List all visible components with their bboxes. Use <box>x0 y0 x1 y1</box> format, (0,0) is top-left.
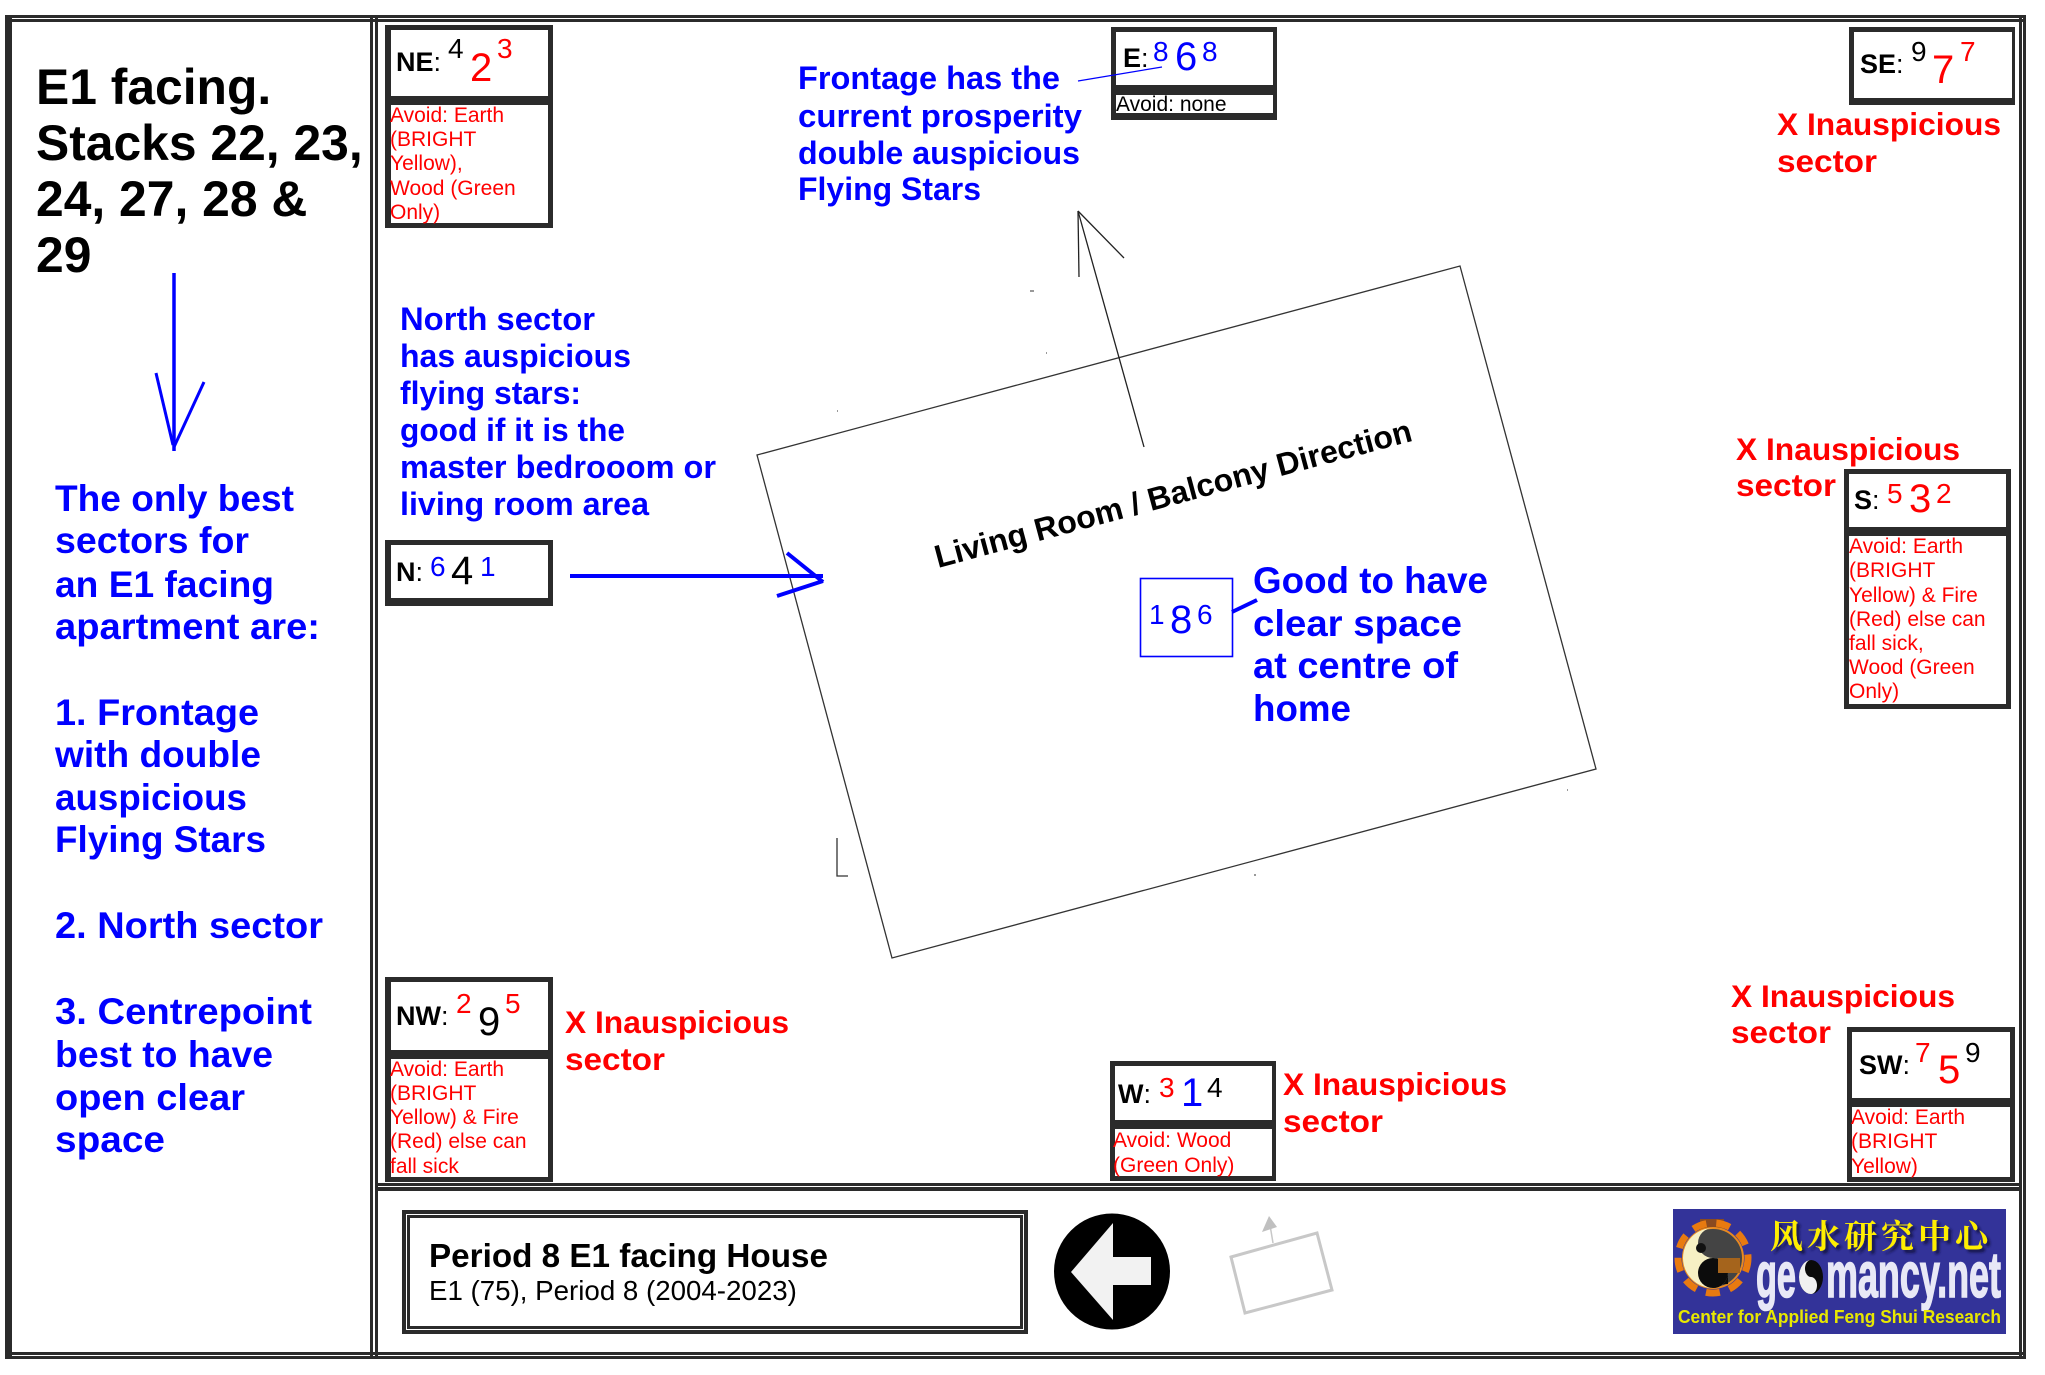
panel: NW sector: Avoid: Earth <box>390 1058 504 1081</box>
label: living room direction: Living Room / Balcony Direction <box>930 413 1416 575</box>
callout: frontage: Flying Stars <box>798 171 981 207</box>
connector: centre box to callout <box>1232 600 1257 612</box>
panel: NE sector: (BRIGHT <box>390 128 476 151</box>
text block: best sectors list <box>54 477 323 1160</box>
text block: best sectors list: sectors for <box>55 519 249 561</box>
panel: SE sector: 9 <box>1911 36 1927 67</box>
callout: centre clear space: home <box>1253 687 1351 729</box>
panel: W sector <box>1110 1061 1276 1181</box>
panel: W sector: Avoid: Wood <box>1113 1129 1231 1152</box>
diagram: house plan <box>757 266 1596 958</box>
text block: best sectors list: 2. North sector <box>55 904 323 946</box>
panel: NW sector: 2 <box>456 988 472 1019</box>
panel: NE sector: Wood (Green <box>390 177 516 200</box>
panel: NE sector: 3 <box>497 33 513 64</box>
panel: S sector: S: <box>1854 485 1880 515</box>
panel: NW sector: 9 <box>478 1000 500 1044</box>
panel: centre star box <box>1140 578 1232 656</box>
icon: facing direction arrow in circle <box>1054 1214 1170 1330</box>
callout: SW inauspicious: X Inauspicious <box>1731 978 1955 1014</box>
panel: NE sector: Only) <box>390 201 440 224</box>
title <box>36 59 363 283</box>
callout: S inauspicious <box>1736 431 1960 503</box>
callout: north sector: master bedrooom or <box>400 449 716 485</box>
panel: SW sector: Yellow) <box>1851 1155 1918 1178</box>
callout: north sector: has auspicious <box>400 338 631 374</box>
callout: north sector: flying stars: <box>400 375 581 411</box>
icon: bagua yin yang <box>1678 1219 1748 1293</box>
logo: geomancy.net <box>1673 1209 2006 1334</box>
small marks <box>837 291 1568 875</box>
callout: SW inauspicious <box>1731 978 1955 1050</box>
title: Stacks 22, 23, <box>36 115 363 171</box>
text block: best sectors list: open clear <box>55 1076 245 1118</box>
panel: SW sector: (BRIGHT <box>1851 1130 1938 1153</box>
panel: left sidebar <box>36 59 363 1160</box>
callout: north sector <box>400 301 716 522</box>
text block: best sectors list: apartment are: <box>55 605 320 647</box>
text block: best sectors list: auspicious <box>55 776 247 818</box>
panel: S sector: 5 <box>1887 478 1903 509</box>
icon: mini house orientation <box>1231 1216 1332 1313</box>
panel: NE sector <box>385 25 553 228</box>
callout: centre clear space: Good to have <box>1253 559 1488 601</box>
panel: NE sector: 4 <box>448 33 464 64</box>
callout: frontage <box>798 60 1082 207</box>
callout: S inauspicious: sector <box>1736 467 1836 503</box>
panel: E sector: Avoid: none <box>1116 93 1227 116</box>
callout: north sector: good if it is the <box>400 412 625 448</box>
callout: centre clear space: at centre of <box>1253 644 1459 686</box>
callout: SE inauspicious: X Inauspicious <box>1777 106 2001 142</box>
panel: SW sector: Avoid: Earth <box>1851 1106 1965 1129</box>
panel: W sector: (Green Only) <box>1113 1154 1234 1177</box>
callout: W inauspicious <box>1283 1066 1507 1139</box>
callout: north sector: North sector <box>400 301 595 337</box>
panel: centre star box: 8 <box>1170 598 1192 642</box>
title: E1 facing. <box>36 59 271 115</box>
callout: NW inauspicious: X Inauspicious <box>565 1004 789 1040</box>
panel: E sector: 8 <box>1202 36 1218 67</box>
callout: centre clear space: clear space <box>1253 602 1462 644</box>
text block: best sectors list: space <box>55 1118 165 1160</box>
callout: frontage: double auspicious <box>798 135 1080 171</box>
panel: N sector <box>385 540 553 606</box>
panel: E sector: E: <box>1123 43 1149 73</box>
panel: E sector <box>1111 27 1277 120</box>
panel: NW sector: 5 <box>505 988 521 1019</box>
panel: S sector: (BRIGHT <box>1849 559 1936 582</box>
panel: S sector: Wood (Green <box>1849 656 1975 679</box>
panel: E sector: 8 <box>1153 36 1169 67</box>
callout: frontage: Frontage has the <box>798 60 1060 96</box>
panel: centre star box: 1 <box>1149 599 1165 630</box>
panel: NW sector: (BRIGHT <box>390 1082 476 1105</box>
callout: NW inauspicious <box>565 1004 789 1077</box>
panel: SE sector <box>1849 27 2015 105</box>
panel: N sector: 1 <box>480 551 496 582</box>
arrow: north sector to house <box>570 553 823 596</box>
icon: yin yang letter o <box>1799 1260 1823 1294</box>
panel: S sector: Avoid: Earth <box>1849 535 1963 558</box>
panel: E sector: 6 <box>1175 35 1197 79</box>
text block: best sectors list: 3. Centrepoint <box>55 990 313 1032</box>
callout: NW inauspicious: sector <box>565 1041 665 1077</box>
callout: W inauspicious: X Inauspicious <box>1283 1066 1507 1102</box>
panel: W sector: W: <box>1118 1079 1151 1109</box>
panel: NE sector: Avoid: Earth <box>390 104 504 127</box>
text block: best sectors list: with double <box>54 733 261 775</box>
text block: best sectors list: best to have <box>55 1033 273 1075</box>
text block: best sectors list: 1. Frontage <box>55 691 259 733</box>
panel: NE sector: NE: <box>396 47 441 77</box>
callout: frontage: current prosperity <box>798 98 1082 134</box>
panel: NW sector: (Red) else can <box>390 1130 527 1153</box>
callout: centre clear space <box>1253 559 1488 729</box>
text block: best sectors list: The only best <box>55 477 295 519</box>
panel: centre star box: 6 <box>1197 599 1213 630</box>
panel: SW sector <box>1847 1027 2015 1182</box>
panel: bottom title box: Period 8 E1 facing House <box>429 1237 828 1274</box>
panel: S sector: 3 <box>1909 477 1931 521</box>
panel: S sector: fall sick, <box>1849 632 1924 655</box>
panel: NW sector: Yellow) & Fire <box>390 1106 519 1129</box>
callout: SE inauspicious <box>1777 106 2001 179</box>
panel: SW sector: 7 <box>1915 1037 1931 1068</box>
panel: NW sector: NW: <box>396 1001 448 1031</box>
panel: W sector: 3 <box>1159 1072 1175 1103</box>
arrow: down to best sectors list <box>156 273 204 451</box>
panel: bottom title box <box>404 1212 1026 1332</box>
callout: SE inauspicious: sector <box>1777 143 1877 179</box>
panel: S sector: (Red) else can <box>1849 608 1986 631</box>
panel: SE sector: 7 <box>1960 36 1976 67</box>
text block: best sectors list: an E1 facing <box>55 563 274 605</box>
panel: S sector: 2 <box>1936 478 1952 509</box>
panel: NW sector <box>385 977 553 1182</box>
panel: NE sector: 2 <box>470 46 492 90</box>
panel: W sector: 4 <box>1207 1072 1223 1103</box>
panel: SE sector: SE: <box>1860 49 1904 79</box>
logo: geomancy.net: 风水研究中心 <box>1770 1211 1992 1258</box>
text block: best sectors list: Flying Stars <box>55 818 266 860</box>
panel: S sector: Only) <box>1849 680 1899 703</box>
callout: north sector: living room area <box>400 486 649 522</box>
panel: NW sector: fall sick <box>390 1155 459 1178</box>
logo: geomancy.net: ge <box>1756 1239 1796 1311</box>
title: 29 <box>36 227 91 283</box>
panel: SW sector: 5 <box>1938 1048 1960 1092</box>
panel: N sector: N: <box>396 557 423 587</box>
panel: S sector: Yellow) & Fire <box>1849 584 1978 607</box>
panel: NE sector: Yellow), <box>390 152 463 175</box>
callout: SW inauspicious: sector <box>1731 1014 1831 1050</box>
logo: geomancy.net: Center for Applied Feng Shui Research <box>1678 1307 2001 1327</box>
panel: N sector: 6 <box>430 551 446 582</box>
callout: S inauspicious: X Inauspicious <box>1736 431 1960 467</box>
panel: SE sector: 7 <box>1932 48 1954 92</box>
connector: frontage to E sector <box>1078 67 1162 81</box>
panel: N sector: 4 <box>451 549 473 593</box>
panel: SW sector: SW: <box>1859 1050 1910 1080</box>
panel: bottom title box: E1 (75), Period 8 (2004-2023) <box>429 1275 797 1306</box>
panel: SW sector: 9 <box>1965 1037 1981 1068</box>
title: 24, 27, 28 & <box>36 171 307 227</box>
panel: S sector <box>1844 469 2011 709</box>
callout: W inauspicious: sector <box>1283 1103 1383 1139</box>
panel: W sector: 1 <box>1181 1071 1203 1115</box>
arrow: facing direction <box>1078 211 1144 447</box>
